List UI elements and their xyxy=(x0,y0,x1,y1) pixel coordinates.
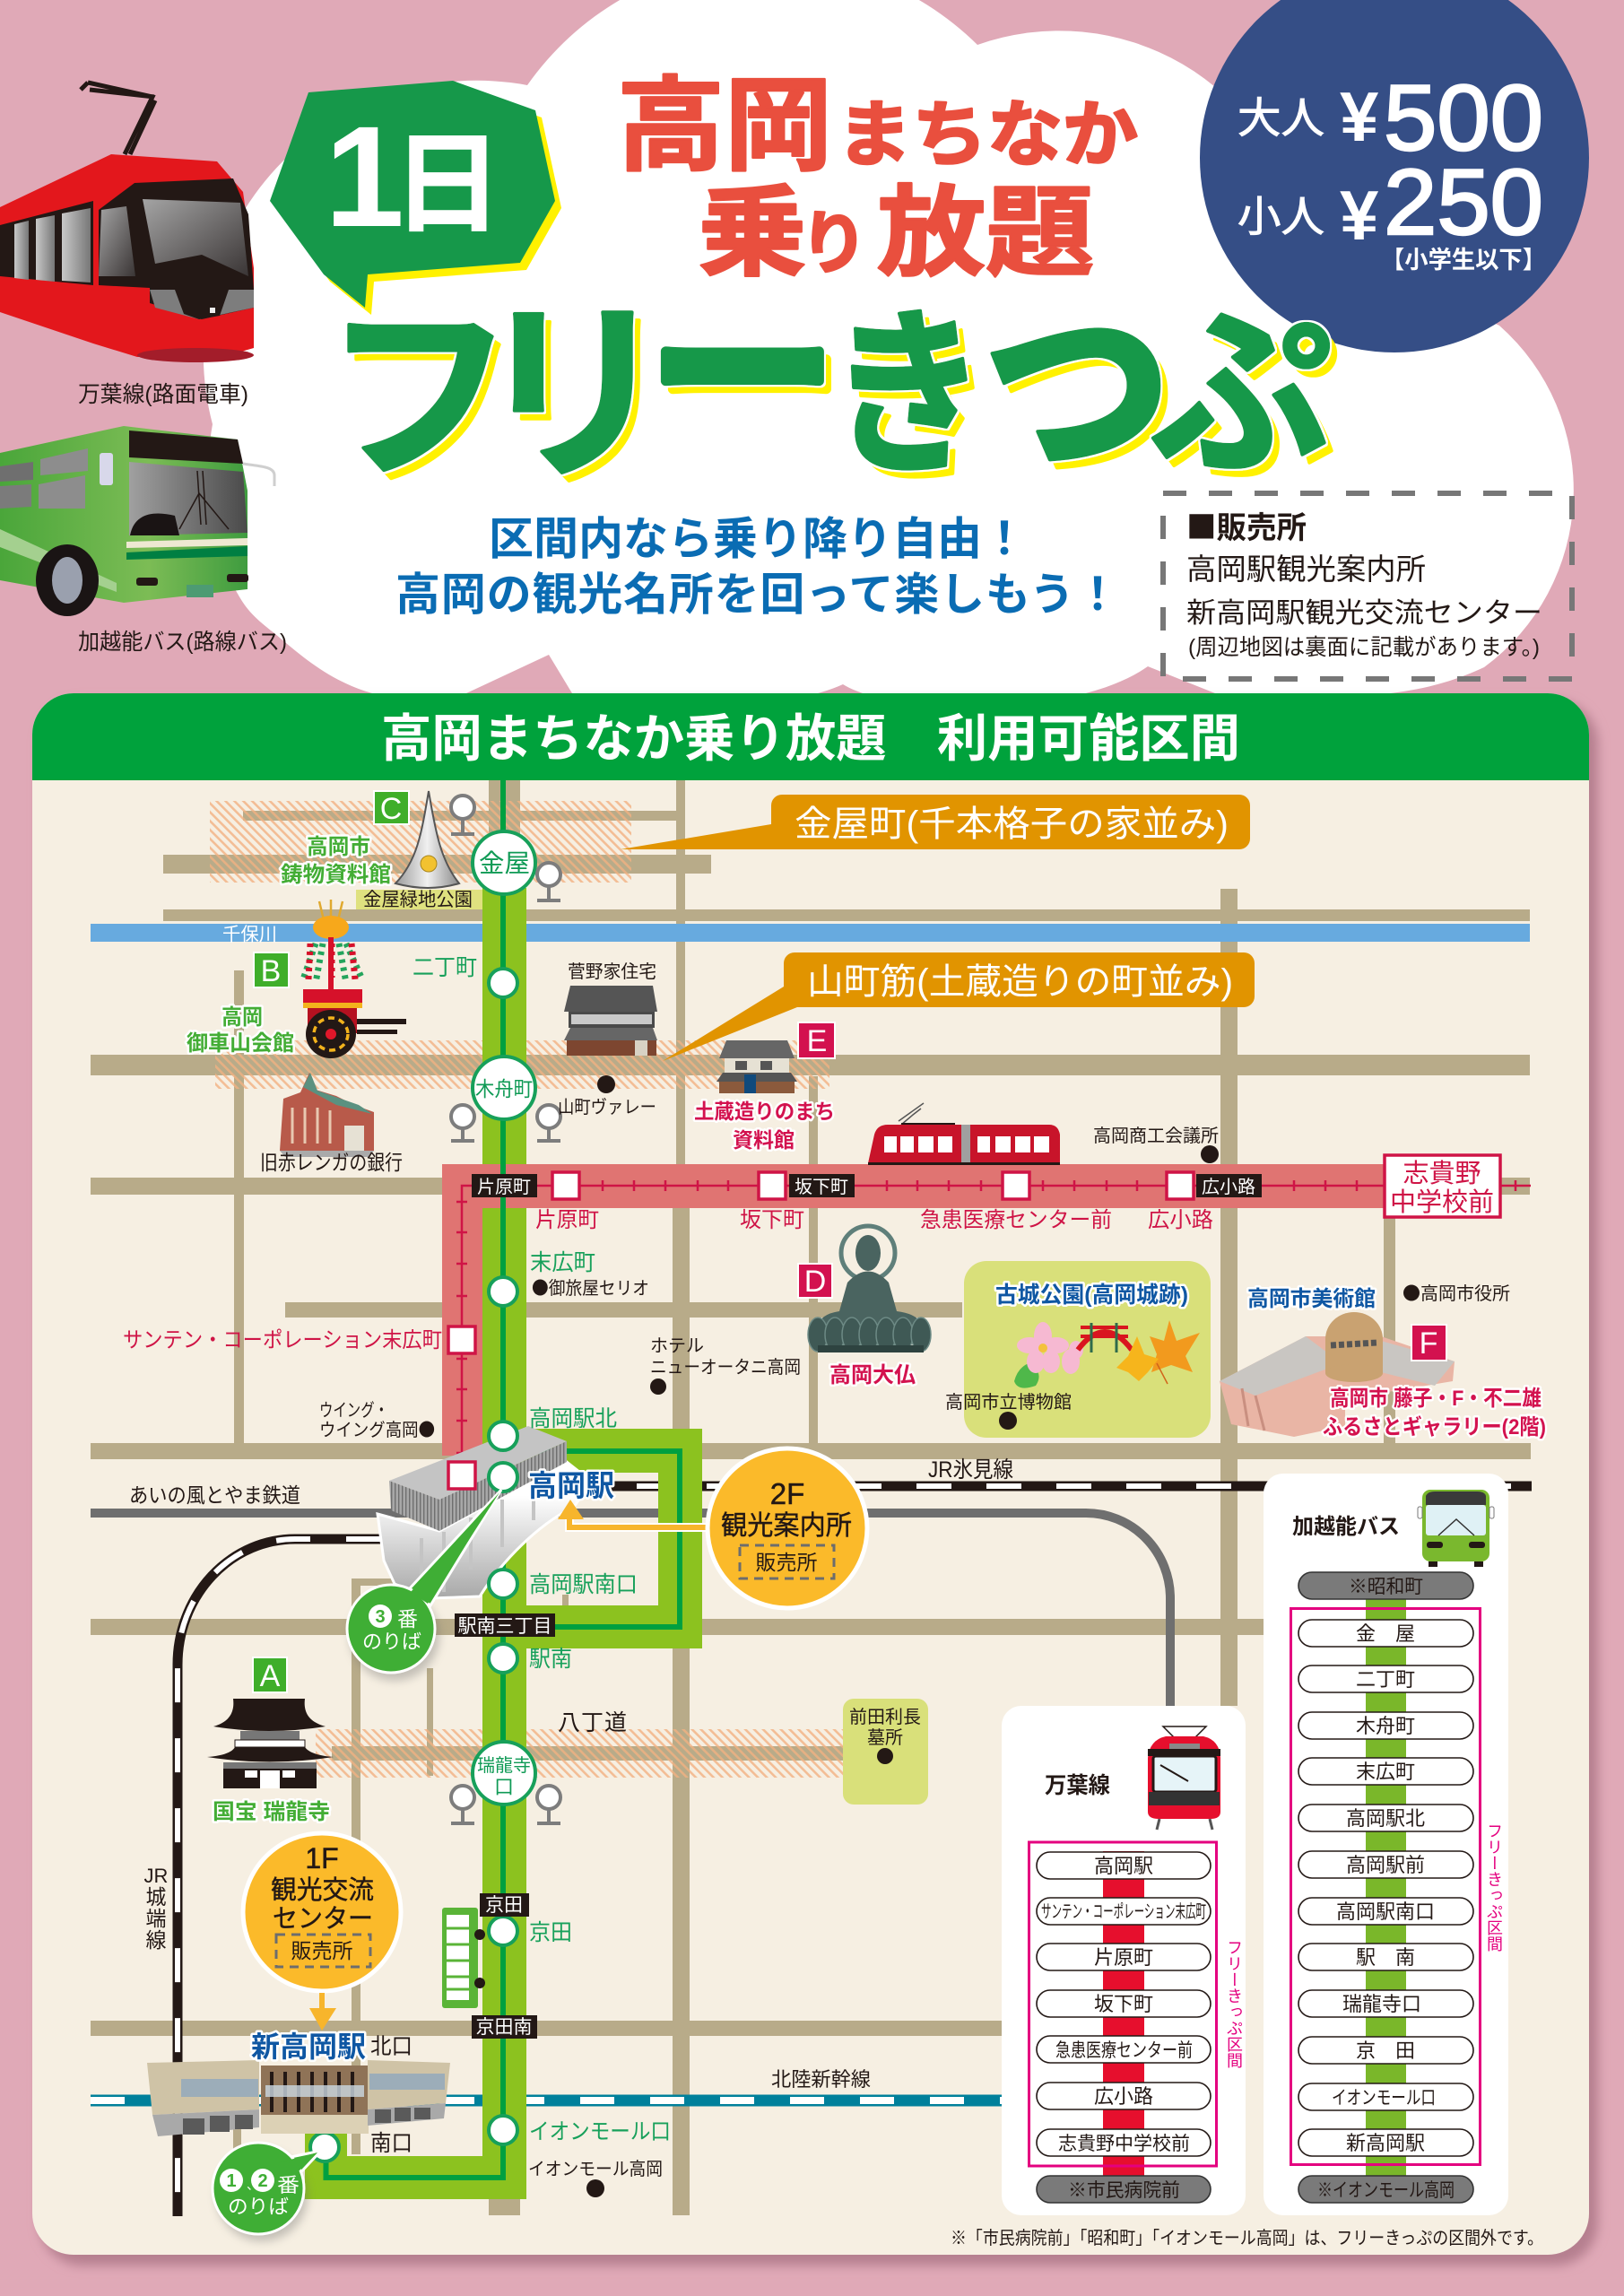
boarding bubble: platforms 1 and 2: 2 xyxy=(257,2171,268,2191)
bus stop names: 京田 xyxy=(529,1920,572,1945)
landmark D: Takaoka Daibutsu: 高岡大仏 xyxy=(829,1363,916,1387)
stop list: 京 田 xyxy=(1356,2039,1415,2062)
poi: Wing Wing: ウイング高岡● xyxy=(319,1415,435,1441)
station label: 新高岡駅: 新高岡駅 xyxy=(251,2031,366,2063)
bus stops xyxy=(310,969,517,2161)
building: 菅野家住宅 xyxy=(564,961,657,1056)
callout: 山町筋 xyxy=(663,952,1255,1061)
boarding bubble: platform 3 xyxy=(347,1490,501,1681)
bus stop black tags xyxy=(455,1613,555,2039)
callout: 山町筋: 山町筋(土蔵造りの町並み) xyxy=(807,962,1233,1002)
stop list: 広小路 xyxy=(1094,2085,1153,2108)
info bubble: 2F tourist office xyxy=(558,1448,867,1608)
speech bubble: 1日 xyxy=(270,81,561,315)
stop list: 駅 南 xyxy=(1356,1946,1415,1969)
panel: castle park: 高岡市立博物館 xyxy=(945,1392,1072,1413)
terminus: Shikino junior high xyxy=(1385,1155,1500,1217)
major stop: 金屋 xyxy=(473,831,535,894)
price circle: 500 xyxy=(1384,66,1543,170)
illustration: green bus xyxy=(0,426,274,616)
tram route band xyxy=(442,1164,1385,1456)
poi: 山町ヴァレー: 山町ヴァレー xyxy=(558,1097,656,1118)
exit label: 南口: 南口 xyxy=(370,2131,413,2156)
line: JR Himi xyxy=(583,1482,1532,1491)
tram stops xyxy=(448,1172,1194,1489)
major stop: 瑞龍寺口: 瑞龍寺 xyxy=(477,1755,531,1776)
card: Manyosen line: 万葉線 xyxy=(1045,1773,1110,1798)
stop list xyxy=(1298,1620,1473,2203)
title: フリーきっぷ: フ xyxy=(325,291,513,502)
panel: Maeda Toshinaga grave: 前田利長 xyxy=(849,1707,921,1727)
landmark A: Zuiryuji temple: A xyxy=(260,1659,281,1693)
tram stop names: 急患医療センター前 xyxy=(920,1208,1112,1232)
building: old red-brick bank: 旧赤レンガの銀行 xyxy=(260,1151,403,1174)
info bubble: 2F tourist office: 販売所 xyxy=(755,1551,818,1574)
sales locations box: (周辺地図は裏面に記載があります。) xyxy=(1188,635,1540,660)
tram stop name tags: 広小路 xyxy=(1202,1177,1255,1197)
boarding bubble: platform 3: 番 xyxy=(397,1607,418,1631)
stop list: 新高岡駅 xyxy=(1346,2132,1425,2154)
line name: あいの風とやま鉄道: あいの風とやま鉄道 xyxy=(129,1483,300,1507)
poi: city hall: ●高岡市役所 xyxy=(1403,1279,1510,1305)
major stop: 瑞龍寺口: 口 xyxy=(494,1776,514,1798)
poi: Wing Wing: ウイング・ xyxy=(319,1400,388,1421)
panel: Maeda Toshinaga grave xyxy=(843,1699,928,1805)
major stop: 木舟町: 木舟町 xyxy=(475,1077,533,1100)
stop list: ※市民病院前 xyxy=(1068,2180,1180,2201)
info bubble: 1F exchange centre xyxy=(243,1833,401,2031)
title: 高岡まちなか xyxy=(617,70,1138,184)
price circle: 小人 xyxy=(1238,193,1324,240)
station label: 高岡駅: 高岡駅 xyxy=(528,1469,614,1502)
info bubble: 1F exchange centre: 観光交流 xyxy=(271,1875,374,1905)
river xyxy=(91,924,1530,942)
title: 乗り放題: り xyxy=(800,206,868,283)
panel: route map xyxy=(32,693,1589,2255)
line name: JR城端線: 城 xyxy=(145,1885,167,1909)
bus stop names: 高岡駅南口 xyxy=(529,1572,638,1597)
major stop: 金屋: 金屋 xyxy=(479,849,530,877)
stop list: 急患医療センター前 xyxy=(1055,2040,1193,2061)
panel shadow xyxy=(39,700,1598,2266)
card: Kaetsuno bus line: 加越能バス xyxy=(1292,1515,1400,1539)
landmark F: art museum: F xyxy=(1420,1326,1437,1361)
price circle: 大人 xyxy=(1238,94,1324,142)
line name: JR氷見線: JR氷見線 xyxy=(928,1457,1013,1483)
card: Manyosen line: フリーきっぷ区間 xyxy=(1225,1939,1243,2069)
bus stop names: 二丁町 xyxy=(413,955,477,980)
landmark B: festival float: 御車山会館 xyxy=(187,1031,294,1056)
landmark F: art museum: 高岡市美術館 xyxy=(1247,1287,1376,1311)
landmark B: festival float: 高岡 xyxy=(221,1005,263,1030)
landmark F: art museum: 高岡市 藤子・F・不二雄 xyxy=(1330,1387,1541,1411)
boarding bubble: platforms 1 and 2: 、 xyxy=(247,2178,259,2192)
tram stop names xyxy=(123,1208,1213,1352)
stop list: ※イオンモール高岡 xyxy=(1317,2180,1455,2201)
sales locations box: ■販売所 xyxy=(1186,503,1307,547)
subtitle xyxy=(395,514,1120,620)
price circle: 250 xyxy=(1384,151,1543,255)
terminus: Shikino junior high: 志貴野 xyxy=(1403,1159,1481,1188)
cloud shape xyxy=(204,0,1574,708)
poi: Aeon Mall xyxy=(528,2159,663,2197)
bus stop names: 高岡駅北 xyxy=(529,1406,617,1431)
bus stop black tags: 京田 xyxy=(485,1895,523,1916)
info bubble: 1F exchange centre: 1F xyxy=(305,1842,339,1874)
sales locations box: 高岡駅観光案内所 xyxy=(1186,552,1426,586)
tram stop names: サンテン・コーポレーション末広町 xyxy=(123,1328,442,1352)
speech bubble: 1日: 日 xyxy=(393,124,502,246)
sales locations box xyxy=(1163,493,1572,679)
stop list: 金 屋 xyxy=(1356,1622,1415,1645)
poi: Hotel New Otani xyxy=(650,1336,801,1395)
landmark E: earthen storehouse museum: 土蔵造りのまち xyxy=(694,1100,835,1123)
poi: Hotel New Otani: ニューオータニ高岡 xyxy=(650,1357,801,1378)
stop list: 高岡駅北 xyxy=(1346,1807,1425,1830)
title: 高岡まちなか: 高岡 xyxy=(617,70,832,184)
building: Takaoka station xyxy=(378,1426,592,1598)
panel: castle park: 古城公園(高岡城跡) xyxy=(995,1282,1188,1308)
tram stop name tags xyxy=(472,1174,1262,1197)
line name: 北陸新幹線: 北陸新幹線 xyxy=(771,2068,871,2091)
tram stop names: 片原町 xyxy=(535,1208,599,1232)
landmark E: earthen storehouse museum: 資料館 xyxy=(733,1128,795,1152)
tram stop names: 広小路 xyxy=(1148,1208,1213,1232)
info bubble: 1F exchange centre: 販売所 xyxy=(291,1939,353,1962)
title: フリーきっぷ: ー xyxy=(648,268,837,479)
title: フリーきっぷ xyxy=(325,244,1332,503)
card: Kaetsuno bus line xyxy=(1264,1474,1508,2215)
bus route centre line xyxy=(326,780,680,2178)
info bubble: 1F exchange centre: センター xyxy=(273,1905,373,1934)
boarding bubble: platforms 1 and 2: のりば xyxy=(228,2196,289,2218)
bus stop names: 末広町 xyxy=(530,1250,595,1275)
stop list: 高岡駅前 xyxy=(1346,1854,1425,1876)
icon: bus front xyxy=(1418,1490,1494,1567)
stop list: イオンモール口 xyxy=(1332,2088,1436,2109)
stop list: 高岡駅 xyxy=(1094,1855,1153,1877)
line: Hokuriku Shinkansen xyxy=(91,2095,1002,2106)
line name: JR城端線: 端 xyxy=(145,1907,167,1930)
boarding bubble: platforms 1 and 2: 1 xyxy=(226,2171,237,2191)
building: old red-brick bank xyxy=(260,1073,403,1174)
panel header xyxy=(32,693,1589,780)
card: Kaetsuno bus line: フリーきっぷ区間 xyxy=(1485,1822,1503,1952)
stop list xyxy=(1037,1852,1211,2203)
bus stop black tags: 駅南三丁目 xyxy=(457,1616,552,1637)
illustration: red tram xyxy=(0,83,254,362)
tram stop name tags: 坂下町 xyxy=(795,1177,848,1197)
landmark D: Takaoka Daibutsu xyxy=(798,1226,931,1387)
title: 乗り放題: 放題 xyxy=(877,178,1094,289)
footnote: ※「市民病院前」「昭和町」「イオンモール高岡」は、フリーきっぷの区間外です。 xyxy=(951,2228,1543,2248)
landmark C: casting museum xyxy=(281,791,459,888)
boarding bubble: platform 3: 3 xyxy=(375,1607,386,1627)
tram route centre line xyxy=(456,1180,1531,1475)
road name: 八丁道: 八丁道 xyxy=(558,1710,627,1735)
bus stop black tags: 京田南 xyxy=(475,2017,533,2038)
line name: JR城端線: 線 xyxy=(145,1928,167,1952)
tram stop names: 坂下町 xyxy=(740,1208,804,1232)
poi: 御旅屋セリオ: ●御旅屋セリオ xyxy=(532,1274,649,1300)
exit label: 北口: 北口 xyxy=(370,2034,413,2059)
callout: 金屋町 xyxy=(621,795,1250,849)
info bubble: 2F tourist office: 2F xyxy=(770,1477,804,1510)
label: tram: 万葉線(路面電車) xyxy=(78,382,248,407)
landmark D: Takaoka Daibutsu: D xyxy=(804,1265,826,1299)
bus stop names: 駅南 xyxy=(529,1647,572,1672)
card: Manyosen line xyxy=(1002,1706,1246,2215)
poi: 山町ヴァレー xyxy=(558,1075,656,1118)
boarding bubble: platforms 1 and 2: 番 xyxy=(277,2174,300,2196)
price circle: ¥ xyxy=(1340,176,1379,255)
landmark C: casting museum: C xyxy=(380,792,402,826)
landmark E: earthen storehouse museum xyxy=(694,1022,835,1152)
road network xyxy=(91,780,1531,2215)
sakura, bridge and maple xyxy=(1014,1320,1200,1388)
title: フリーきっぷ: ぷ xyxy=(1151,293,1332,496)
title: フリーきっぷ: リ xyxy=(477,287,670,503)
stop list: サンテン・コーポレーション末広町 xyxy=(1041,1901,1206,1922)
icon: tram front xyxy=(1148,1726,1220,1830)
price circle: 【小学生以下】 xyxy=(1381,247,1546,274)
poi: chamber of commerce: 高岡商工会議所 xyxy=(1093,1126,1219,1146)
stop list: 瑞龍寺口 xyxy=(1342,1993,1421,2015)
building: 菅野家住宅: 菅野家住宅 xyxy=(568,961,656,982)
stop list: 高岡駅南口 xyxy=(1336,1900,1435,1923)
landmark F: art museum: ふるさとギャラリー(2階) xyxy=(1323,1415,1546,1439)
title: フリーきっぷ: き xyxy=(829,296,986,496)
landmark A: Zuiryuji temple xyxy=(207,1657,334,1824)
line: Ainokaze Toyama railway xyxy=(91,1513,1170,1706)
price circle: ¥ xyxy=(1340,77,1379,156)
bus route band xyxy=(305,888,702,2199)
bus stop names xyxy=(413,955,671,2144)
poi: Wing Wing xyxy=(319,1400,435,1441)
stop list: 末広町 xyxy=(1356,1761,1415,1783)
landmark B: festival float xyxy=(187,900,406,1058)
title: 乗り放題: 乗 xyxy=(698,178,807,289)
landmark F: art museum xyxy=(1220,1287,1546,1439)
title: フリーきっぷ: っ xyxy=(960,244,1188,500)
card: Kaetsuno bus line: ※昭和町 xyxy=(1349,1577,1423,1597)
poi: Hotel New Otani: ホテル xyxy=(650,1336,704,1356)
stop list: 二丁町 xyxy=(1356,1668,1415,1691)
shelter icons xyxy=(451,796,560,1823)
title: 乗り放題 xyxy=(698,178,1094,289)
header title: 高岡まちなか乗り放題 利用可能区間 xyxy=(381,710,1240,768)
panel: castle park xyxy=(945,1261,1211,1438)
illustration: side view bus xyxy=(442,1908,485,2008)
poi: Aeon Mall: イオンモール高岡 xyxy=(528,2159,663,2179)
illustration: map tram xyxy=(868,1103,1060,1165)
subtitle: 区間内なら乗り降り自由！ xyxy=(489,514,1027,564)
price circle xyxy=(1200,0,1589,352)
landmark A: Zuiryuji temple: 国宝 瑞龍寺 xyxy=(213,1800,330,1824)
hatched heritage zones xyxy=(210,801,843,1778)
stop list: 坂下町 xyxy=(1094,1993,1153,2015)
stop list: 片原町 xyxy=(1094,1946,1153,1969)
bus stop names: イオンモール口 xyxy=(529,2119,671,2144)
sales locations box: 新高岡駅観光交流センター xyxy=(1186,597,1542,629)
boarding bubble: platforms 1 and 2 xyxy=(213,2143,321,2241)
landmark B: festival float: B xyxy=(261,954,281,988)
landmark E: earthen storehouse museum: E xyxy=(807,1024,827,1058)
major stop: 瑞龍寺口 xyxy=(473,1742,535,1805)
building: Shin-Takaoka station xyxy=(147,2060,450,2136)
major stop: 木舟町 xyxy=(473,1057,535,1119)
park tag: 金屋緑地公園: 金屋緑地公園 xyxy=(363,890,473,910)
info bubble: 2F tourist office: 観光案内所 xyxy=(721,1511,852,1541)
river name: 千保川 xyxy=(222,925,277,945)
label: bus: 加越能バス(路線バス) xyxy=(78,630,287,655)
line name: JR城端線 xyxy=(144,1865,168,1952)
landmark C: casting museum: 鋳物資料館 xyxy=(281,863,391,887)
callout: 金屋町: 金屋町(千本格子の家並み) xyxy=(795,804,1229,844)
terminus: Shikino junior high: 中学校前 xyxy=(1390,1187,1494,1217)
line name: JR城端線: JR xyxy=(144,1865,168,1887)
boarding bubble: platform 3: のりば xyxy=(362,1631,421,1653)
stop list: 木舟町 xyxy=(1356,1715,1415,1737)
line: JR Johana xyxy=(178,1539,380,2216)
subtitle: 高岡の観光名所を回って楽しもう！ xyxy=(395,570,1120,620)
speech bubble: 1日: 1 xyxy=(325,96,404,257)
title: 高岡まちなか: まちなか xyxy=(837,95,1138,175)
tram stop name tags: 片原町 xyxy=(477,1177,531,1197)
stop list: 志貴野中学校前 xyxy=(1058,2134,1190,2154)
panel: Maeda Toshinaga grave: 墓所 xyxy=(867,1727,903,1748)
landmark C: casting museum: 高岡市 xyxy=(307,835,370,859)
poi: chamber of commerce xyxy=(1093,1126,1219,1163)
